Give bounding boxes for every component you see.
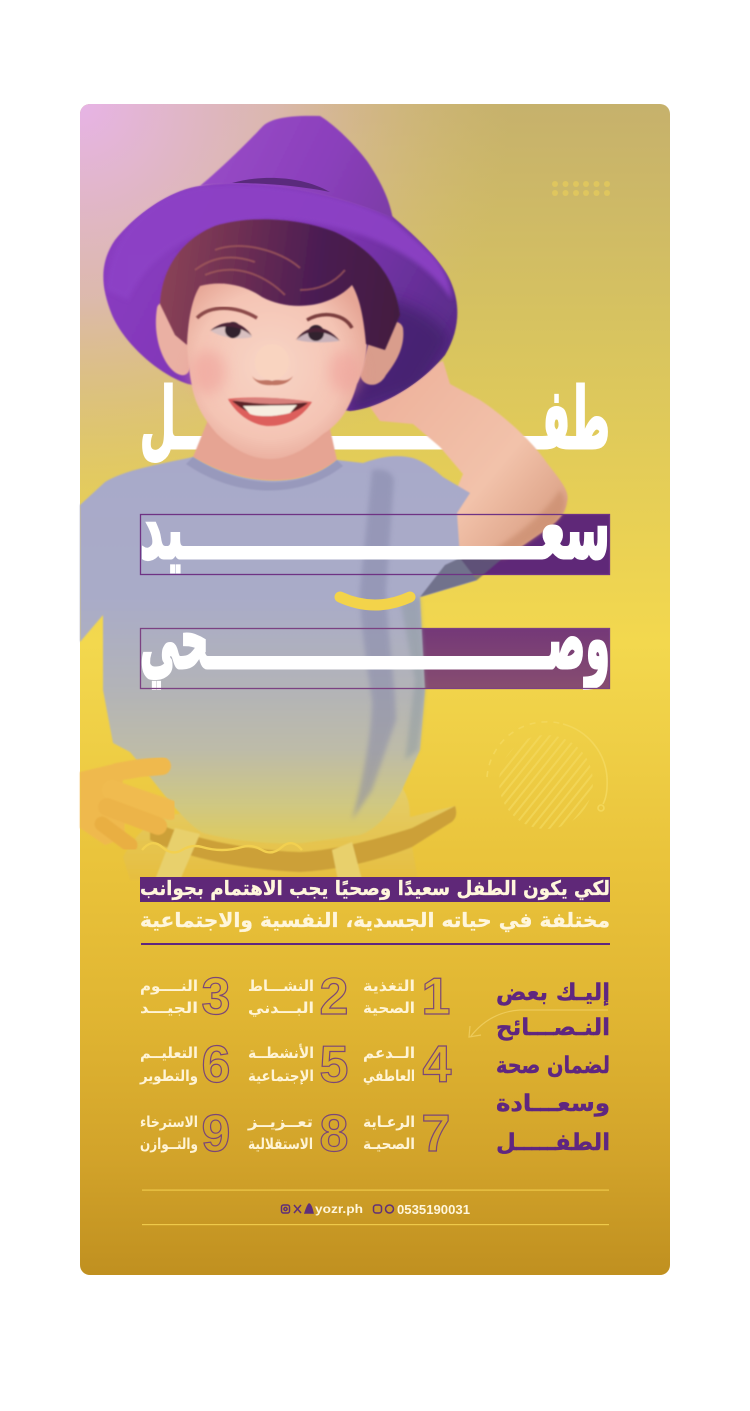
tips grid labels <box>139 977 415 1153</box>
footer rule bottom <box>142 1224 609 1225</box>
illustration: smiling child in a purple hat <box>80 116 568 880</box>
eyes <box>197 308 352 342</box>
outline frame word two <box>140 514 610 574</box>
nose <box>252 344 293 385</box>
whatsapp icons <box>374 1205 394 1213</box>
neck <box>193 420 337 480</box>
arrow <box>469 1010 608 1037</box>
pants and belt <box>123 785 456 880</box>
tips grid labels: العاطفي <box>363 1067 415 1085</box>
smiling mouth <box>228 398 312 426</box>
arm elbow shadow <box>480 490 565 558</box>
side heading: لضمان صحة <box>496 1053 610 1079</box>
tips grid numbers <box>202 968 452 1163</box>
contact row <box>282 1202 470 1217</box>
yellow smile accent <box>340 597 410 605</box>
tips grid labels: الاستقلالية <box>248 1135 313 1153</box>
tips grid labels: الصحيـة <box>363 1135 415 1153</box>
decoration: hatched circle with arc <box>486 721 608 829</box>
raised arm <box>370 361 568 558</box>
tips grid labels: الأنشطــة <box>248 1044 314 1062</box>
tips grid labels: الصحية <box>363 999 415 1017</box>
phone number: 0535190031 <box>397 1202 470 1217</box>
tips grid numbers: 8 <box>320 1105 348 1163</box>
hand on hip <box>80 762 170 845</box>
hat <box>103 116 457 415</box>
tips grid labels: والتــوازن <box>140 1135 198 1153</box>
handle: yozr.ph <box>315 1204 363 1216</box>
cheeks <box>190 350 361 394</box>
decoration: dot grid <box>552 181 610 196</box>
social icons <box>282 1204 313 1213</box>
tips grid numbers: 2 <box>320 968 348 1026</box>
tips grid numbers: 9 <box>202 1105 230 1163</box>
footer rule top <box>142 1190 609 1191</box>
tips grid labels: النشـــاط <box>248 977 314 995</box>
tips grid labels: الجيـــد <box>140 999 198 1017</box>
t-shirt <box>80 456 503 843</box>
tips grid numbers: 3 <box>202 968 230 1026</box>
tips grid numbers: 6 <box>202 1036 230 1094</box>
tips grid numbers: 7 <box>422 1105 450 1163</box>
panel: poster background card <box>80 104 670 1275</box>
intro text: مختلفة في حياته الجسدية، النفسية والاجتماعية <box>140 908 610 933</box>
tips grid numbers: 5 <box>320 1036 348 1094</box>
tips grid labels: والتطوير <box>139 1067 198 1085</box>
tips grid numbers: 1 <box>422 968 450 1026</box>
side heading <box>496 980 610 1156</box>
side heading: إليـك بعض <box>496 980 610 1006</box>
tips grid labels: الــدعم <box>363 1044 415 1062</box>
divider under intro <box>141 943 610 945</box>
hair highlights <box>195 246 345 295</box>
side heading: الطفـــــل <box>496 1130 610 1156</box>
wavy decoration <box>142 843 302 852</box>
purple band behind word two <box>140 514 610 575</box>
intro text: لكي يكون الطفل سعيدًا وصحيًا يجب الاهتمام بجوانب <box>140 876 610 901</box>
tips grid numbers: 4 <box>423 1036 452 1094</box>
tips grid labels: الإجتماعية <box>248 1067 314 1085</box>
collar <box>186 457 343 491</box>
outline frame word three <box>140 628 610 688</box>
tips grid labels: التعليــم <box>140 1044 198 1062</box>
face <box>187 274 367 459</box>
intro text <box>140 876 610 933</box>
purple band behind word three <box>140 628 610 689</box>
tips grid labels: النــــوم <box>140 977 198 995</box>
tips grid labels: تعــزيــز <box>247 1113 313 1131</box>
hair <box>160 219 400 350</box>
ears <box>156 303 403 385</box>
intro highlight bar <box>140 877 610 902</box>
tips grid labels: الاسترخاء <box>140 1113 198 1131</box>
tips grid labels: البـــدني <box>248 999 314 1017</box>
tips grid labels: التغذية <box>363 977 415 995</box>
side heading: وسعـــادة <box>496 1091 610 1117</box>
tips grid labels: الرعـاية <box>363 1113 415 1131</box>
side heading: النـصـــائح <box>496 1015 610 1041</box>
